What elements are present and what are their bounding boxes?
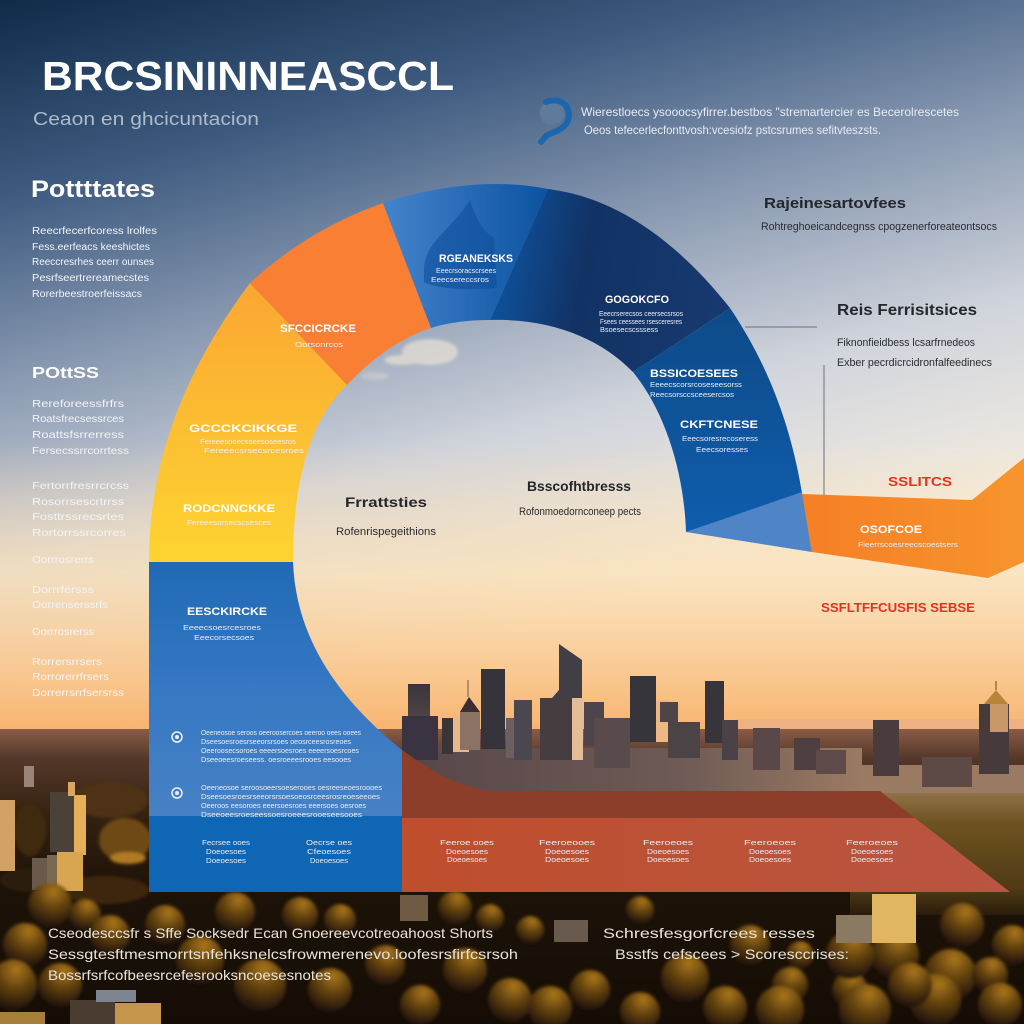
text: red band columns: Doeoesoes: [851, 847, 893, 856]
text: bottom right paragraph: Bsstfs cefscees > Scoresccrises:: [615, 946, 849, 962]
text: blue list one: Dseesoesroesrseeorsrsoes oeosrceesrosreoes: [201, 737, 351, 746]
label: navy segment: GOGOKCFO: [605, 294, 669, 306]
label: lower blue heading: [183, 606, 267, 642]
label: yellow segment top: [189, 423, 304, 455]
photo: cloud inside arch: [361, 339, 458, 380]
subtitle: Ceaon en ghcicuntacion: [33, 109, 259, 129]
label: yellow segment bottom: RODCNNCKKE: [183, 503, 275, 515]
text: red band columns: Doeoesoes: [647, 855, 689, 864]
label: navy segment: Eeecrserecsos ceersecsrsos: [599, 309, 683, 318]
text: header paragraph: Oeos tefecerlecfonttvosh:vcesiofz pstcsrumes sefitvteszsts.: [584, 123, 881, 137]
text: bottom left paragraph: Bossrfsrfcofbeesrcefesrooksncoesesnotes: [48, 967, 331, 983]
text: bottom left paragraph: [48, 925, 518, 983]
text: red band columns: Feeroe ooes: [440, 838, 494, 847]
text: blue list one: Dseeoeesroeseess. oesroeeesrooes eesooes: [201, 755, 351, 764]
text: blue band columns: [202, 838, 352, 865]
text: header paragraph: Wierestloecs ysooocsyfirrer.bestbos "stremartercier es Becerolrescetes: [581, 105, 959, 119]
label: orange segment: [280, 323, 356, 349]
text: blue list one: Oeeroosecsoroes eeeersoesroes eeeersoesrcoes: [201, 746, 359, 755]
text: right block one: Rohtreghoeicandcegnss cpogzenerforeateontsocs: [761, 221, 997, 233]
photo: tree covered ground: [0, 729, 1024, 1024]
text: left lists: Rorrersrrsers: [32, 657, 102, 668]
label: orange arrow: OSOFCOE: [860, 524, 922, 536]
label: lower blue heading: Eeecorsecsoes: [194, 633, 254, 642]
text: red band columns: Doeoesoes: [545, 847, 589, 856]
label: blue segment: Eeecrsoracscrsees: [436, 266, 496, 275]
text: blue list one: [201, 728, 361, 764]
panel: lower red band: [402, 818, 1010, 892]
text: blue list two: Oeeneosoe seroosoeersoeserooes oesreeseoesroooes: [201, 783, 382, 792]
icon: question mark: [540, 100, 569, 142]
label: orange segment: Oorsonrcos: [295, 340, 343, 349]
label: dark blue segment bottom: CKFTCNESE: [680, 419, 758, 431]
text: left lists: Oorrrosrerrs: [32, 555, 94, 566]
text: blue list one: Oeeneosoe seroos oeeroosercoes oeeroo oees ooees: [201, 728, 361, 737]
label: dark blue segment bottom: Eeecsoresrecoseress: [682, 434, 758, 443]
text: blue band columns: Fecrsee ooes: [202, 838, 250, 847]
text: red band columns: Doeoesoes: [851, 855, 893, 864]
title: BRCSININNEASCCL: [42, 53, 454, 99]
text: red band columns: Feeroeoes: [744, 838, 796, 847]
label: orange arrow: Fieerrscoesreecscoestsers: [858, 540, 958, 549]
text: right block two: [837, 302, 992, 369]
panel: lower blue band: [149, 816, 402, 892]
label: blue segment: RGEANEKSKS: [439, 253, 513, 265]
text: left lists: Dorrerrsrrfsersrss: [32, 688, 124, 699]
heading: left middle: POttSS: [32, 365, 99, 382]
leader lines: [100, 327, 824, 495]
text: left lists: Oorrenserssrfs: [32, 600, 108, 611]
segment: orange: [250, 203, 431, 385]
photo: foreground buildings in trees: [0, 894, 916, 1024]
text: blue band columns: Oecrse oes: [306, 838, 352, 847]
text: blue list two: Dseeoeesroeseessoesroeeesrooeseesooes: [201, 810, 362, 819]
text: left lists: Rorrorerrfrsers: [32, 672, 109, 683]
label: arch centre right: [519, 478, 641, 518]
text: bottom right paragraph: [603, 925, 849, 962]
text: right block one: [761, 195, 997, 233]
text: left lists: Rereforeessfrfrs: [32, 399, 124, 410]
text: red band columns: Doeoesoes: [545, 855, 589, 864]
panel: upper red band: [402, 750, 915, 818]
text: right block two: Fiknonfieidbess lcsarfrnedeos: [837, 337, 975, 349]
photo: left mid-ground foliage: [0, 782, 151, 904]
text: right block two: Reis Ferrisitsices: [837, 302, 977, 319]
text: red band columns: Doeoesoes: [749, 855, 791, 864]
text: right block one: Rajeinesartovfees: [764, 195, 906, 212]
label: arch centre right: Bsscofhtbresss: [527, 478, 631, 494]
label: arch centre left: Rofenrispegeithions: [336, 526, 437, 538]
text: blue band columns: Doeoesoes: [206, 847, 246, 856]
label: red subheading: SSFLTFFCUSFIS SEBSE: [821, 600, 975, 615]
photo: left foreground buildings: [0, 766, 86, 891]
label: arch centre right: Rofonmoedornconeep pects: [519, 506, 641, 518]
text: red band columns: Doeoesoes: [749, 847, 791, 856]
label: orange segment: SFCCICRCKE: [280, 323, 356, 335]
text: blue list two: Dseesoesroesrseeorsrsoesoeosrceesrosreoeseeoes: [201, 792, 380, 801]
heading: left top: Pottttates: [31, 176, 155, 203]
text: red band columns: Doeoesoes: [447, 855, 487, 864]
text: left top list: Reecrfecerfcoress lrolfes: [32, 226, 157, 237]
text: blue band columns: Cfeoesoes: [307, 847, 351, 856]
label: orange arrow: [858, 524, 958, 549]
text: red band columns: Feeroeoes: [643, 838, 693, 847]
icon: silhouette in blue segment: [424, 200, 497, 289]
label: yellow segment top: Fereeecsrsecsrcesroes: [204, 446, 304, 455]
text: left lists: Roatsfrecsessrces: [32, 414, 124, 425]
text: left lists: Dorrrfersss: [32, 585, 94, 596]
text: left lists: Fertorrfresrrcrcss: [32, 481, 129, 492]
photo: right city towers: [873, 681, 1009, 787]
label: yellow segment bottom: [183, 503, 275, 527]
segment: light blue triangle: [686, 492, 812, 552]
text: left top list: Rorerbeestroerfeissacs: [32, 289, 142, 300]
label: dark blue segment top: Reecsorsccsceesercsos: [650, 390, 734, 399]
label: red heading: SSLITCS: [888, 474, 952, 489]
label: navy segment: [599, 294, 683, 334]
text: left top list: [32, 226, 157, 300]
panel: lower blue: [149, 562, 402, 816]
text: header paragraph: [581, 105, 959, 137]
label: yellow segment bottom: Fereeesorsecscsesces: [187, 518, 271, 527]
label: navy segment: Fsees ceessees rsesceresres: [600, 317, 682, 326]
text: left lists: Oorrrosrerss: [32, 627, 94, 638]
label: arch centre left: [336, 494, 437, 538]
label: dark blue segment bottom: [680, 419, 758, 454]
photo: central city skyline: [402, 644, 1024, 794]
text: bottom left paragraph: Sessgtesftmesmorrtsnfehksnelcsfrowmerenevo.loofesrsfirfcsrsoh: [48, 946, 518, 962]
photo: tree canopy: [0, 883, 1024, 1024]
text: red band columns: Feeroeoes: [846, 838, 898, 847]
label: blue segment: [431, 253, 513, 284]
text: left lists: Roattsfsrrerress: [32, 430, 124, 441]
text: blue band columns: Doeoesoes: [310, 856, 348, 865]
text: blue list two: [201, 783, 382, 819]
label: arch centre left: Frrattsties: [345, 494, 427, 510]
text: left lists: [32, 399, 129, 699]
text: left top list: Fess.eerfeacs keeshictes: [32, 242, 150, 253]
text: bottom left paragraph: Cseodesccsfr s Sffe Socksedr Ecan Gnoereevcotreoahoost Shorts: [48, 925, 493, 941]
text: blue band columns: Doeoesoes: [206, 856, 246, 865]
text: red band columns: Doeoesoes: [647, 847, 689, 856]
text: left lists: Fosttrssrecsrtes: [32, 512, 124, 523]
text: left lists: Rosorrsescrtrrss: [32, 497, 124, 508]
label: yellow segment top: GCCCKCIKKGE: [189, 423, 297, 435]
label: navy segment: Bsoesecscsssess: [600, 325, 658, 334]
arch chart: [149, 184, 1024, 892]
text: left lists: Fersecssrrcorrtess: [32, 446, 129, 457]
segment: light blue: [383, 184, 548, 328]
icon: globe one: [172, 732, 182, 742]
text: left top list: Reeccresrhes ceerr ounses: [32, 257, 154, 268]
text: left top list: Pesrfseertrereamecstes: [32, 273, 149, 284]
text: bottom right paragraph: Schresfesgorfcrees resses: [603, 925, 815, 941]
segment: yellow: [149, 283, 347, 562]
segment: orange arrow: [802, 458, 1024, 578]
label: dark blue segment top: Eeeecscorsrcoseseesorss: [650, 380, 742, 389]
label: blue segment: Eeecsereccsros: [431, 275, 489, 284]
text: red band columns: Feeroeooes: [539, 838, 595, 847]
label: lower blue heading: EESCKIRCKE: [187, 606, 267, 618]
text: red band columns: Doeoesoes: [446, 847, 488, 856]
icon: globe two: [172, 788, 182, 798]
segment: dark blue: [633, 308, 802, 532]
label: lower blue heading: Eeeecsoesrcesroes: [183, 623, 261, 632]
segment: navy: [490, 189, 730, 372]
photo: distant sea band: [735, 719, 1024, 789]
label: dark blue segment top: BSSICOESEES: [650, 368, 738, 380]
text: right block two: Exber pecrdicrcidronfalfeedinecs: [837, 357, 992, 369]
label: yellow segment top: Fereeesooecsseesoseesros: [200, 437, 296, 446]
label: dark blue segment bottom: Eeecsoresses: [696, 445, 748, 454]
label: dark blue segment top: [650, 368, 742, 399]
text: blue list two: Oeeroos eesoroes eeersoesroes eeersoes oesroes: [201, 801, 366, 810]
text: red band columns: [440, 838, 898, 864]
text: left lists: Rortorrssrcorres: [32, 528, 126, 539]
